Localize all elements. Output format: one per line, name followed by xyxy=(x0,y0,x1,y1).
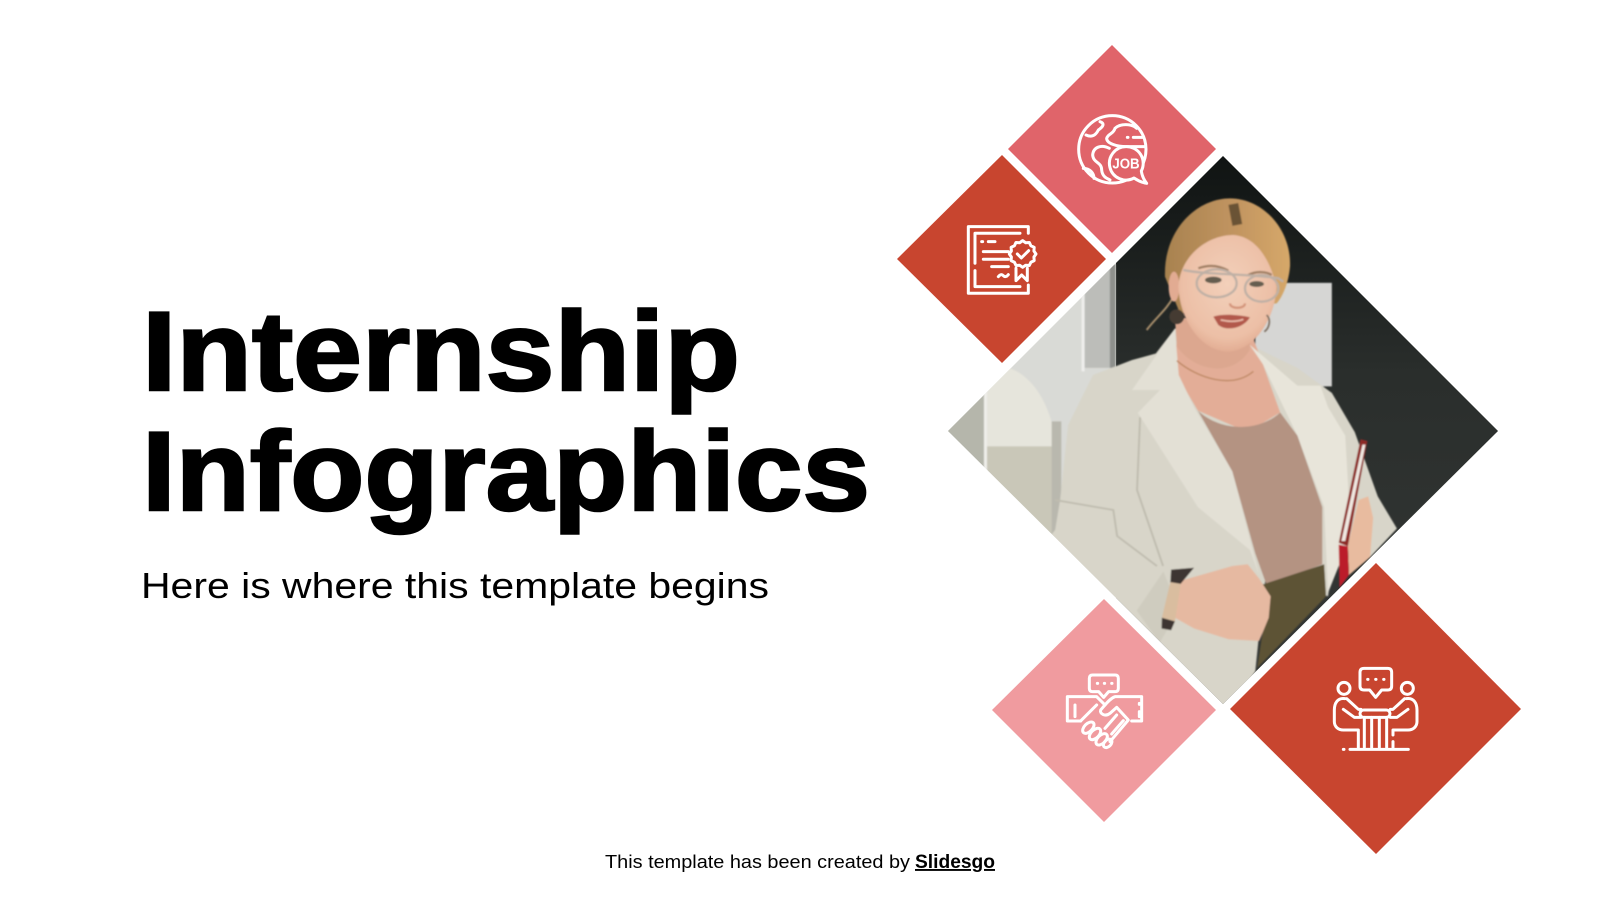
nose xyxy=(1230,303,1245,308)
loose hair xyxy=(1147,297,1173,330)
blazer xyxy=(1045,329,1397,721)
credit line xyxy=(605,851,995,873)
face xyxy=(1178,235,1277,352)
necklace xyxy=(1177,361,1253,381)
icon: globe with job bubble: JOB xyxy=(1112,157,1140,173)
ear xyxy=(1169,272,1179,302)
eyes xyxy=(1205,277,1222,283)
lips xyxy=(1213,315,1250,328)
blazer lapels xyxy=(1134,330,1254,560)
photo: woman holding books in a diamond frame xyxy=(940,150,1510,721)
icon: certificate with seal xyxy=(968,227,1036,293)
bun xyxy=(1169,309,1184,324)
title xyxy=(142,289,870,534)
icon: handshake with speech bubble xyxy=(1067,675,1142,749)
books xyxy=(1339,439,1367,546)
parting xyxy=(1233,204,1237,225)
title: Infographics xyxy=(142,409,870,534)
trousers xyxy=(1257,564,1326,668)
head xyxy=(1147,198,1290,352)
brows xyxy=(1198,266,1272,275)
neck xyxy=(1174,317,1188,344)
diamond: handshake xyxy=(992,599,1216,822)
subtitle: Here is where this template begins xyxy=(141,565,769,606)
earring xyxy=(1264,315,1269,332)
diamond: meeting xyxy=(1230,563,1521,854)
diamond: job search xyxy=(1008,45,1216,253)
cuff xyxy=(1138,574,1168,641)
door panel xyxy=(1255,283,1332,386)
left background strips xyxy=(1083,264,1116,368)
icon: two people meeting at a table xyxy=(1334,668,1417,749)
watch xyxy=(1162,582,1181,621)
glasses xyxy=(1183,269,1283,302)
top xyxy=(1198,411,1322,586)
title: Internship xyxy=(142,289,740,414)
diamond: certificate xyxy=(897,155,1106,363)
credit line: This template has been created by xyxy=(605,851,911,872)
chest skin xyxy=(1176,339,1280,428)
icon: globe with job bubble xyxy=(1079,116,1147,183)
credit line: Slidesgo xyxy=(915,852,995,873)
hair xyxy=(1165,198,1290,313)
hand xyxy=(1175,564,1271,641)
sleeve folds xyxy=(1055,417,1163,566)
